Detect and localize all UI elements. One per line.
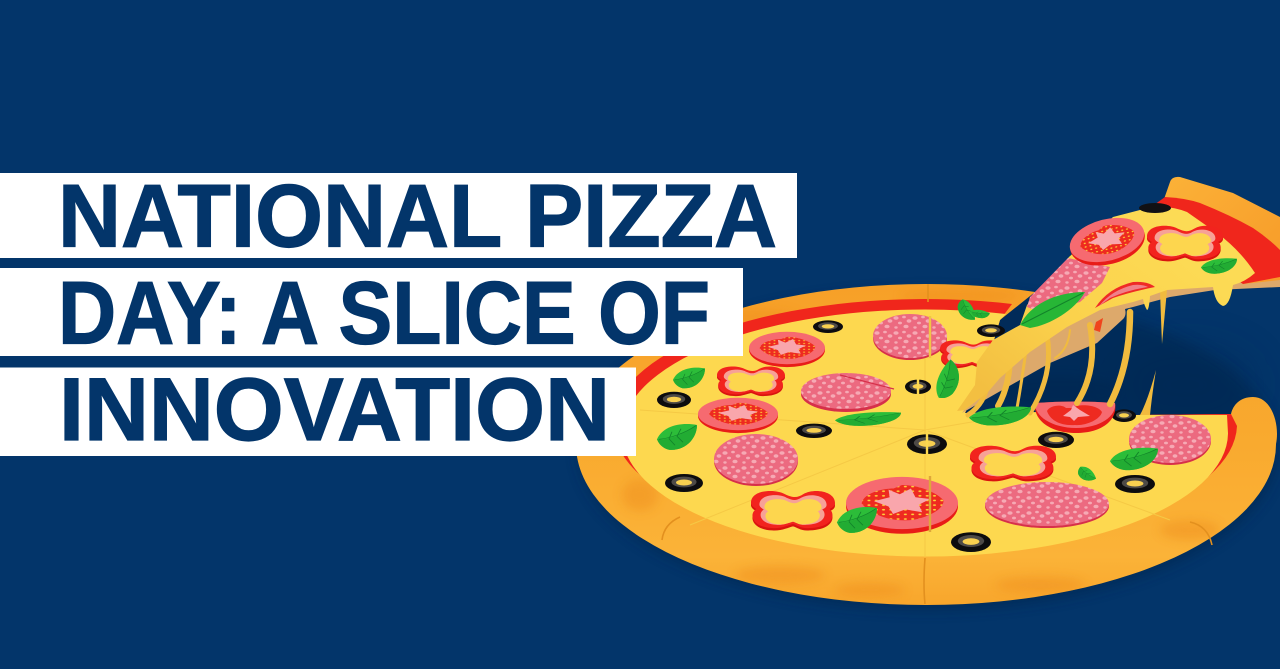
slice pepper [1147, 226, 1223, 261]
toppings: peppers [717, 340, 1056, 531]
bread end sauce spot [1094, 318, 1103, 332]
illustration: whole pizza with missing slice [576, 284, 1277, 605]
cheese strings [968, 312, 1130, 415]
toppings: tomatoes [698, 332, 958, 534]
crust [576, 284, 1277, 605]
title banner: line 3: INNOVATION [59, 359, 610, 459]
slice cheese top [957, 207, 1255, 411]
crust browning [622, 289, 1220, 597]
illustration: lifted slice [928, 177, 1280, 425]
slice tomato [1065, 211, 1150, 273]
slice olive [1139, 203, 1171, 213]
slice bread underside [962, 276, 1280, 413]
slice basil leaves [1201, 258, 1237, 274]
slice small salami [1095, 282, 1155, 308]
crust slice cuts [662, 284, 1212, 604]
toppings: olives [657, 320, 1155, 552]
slice sauce [1140, 197, 1280, 284]
toppings: half tomato under the lifted slice [1035, 402, 1115, 433]
toppings: salami [714, 314, 1211, 528]
front leaves [928, 359, 968, 403]
title banner: line 2: DAY: A SLICE OF [58, 262, 710, 362]
toppings: leaves [657, 298, 1158, 533]
slice outer crust [1163, 177, 1280, 284]
tapered cheese strands [1140, 290, 1167, 415]
slice salami [1027, 258, 1110, 313]
pizza shadow [578, 290, 1278, 610]
title banner: line 1: NATIONAL PIZZA [58, 166, 777, 266]
cheese surface [622, 310, 1228, 557]
cheese slice cuts [640, 315, 1170, 556]
sauce ring [613, 299, 1237, 549]
